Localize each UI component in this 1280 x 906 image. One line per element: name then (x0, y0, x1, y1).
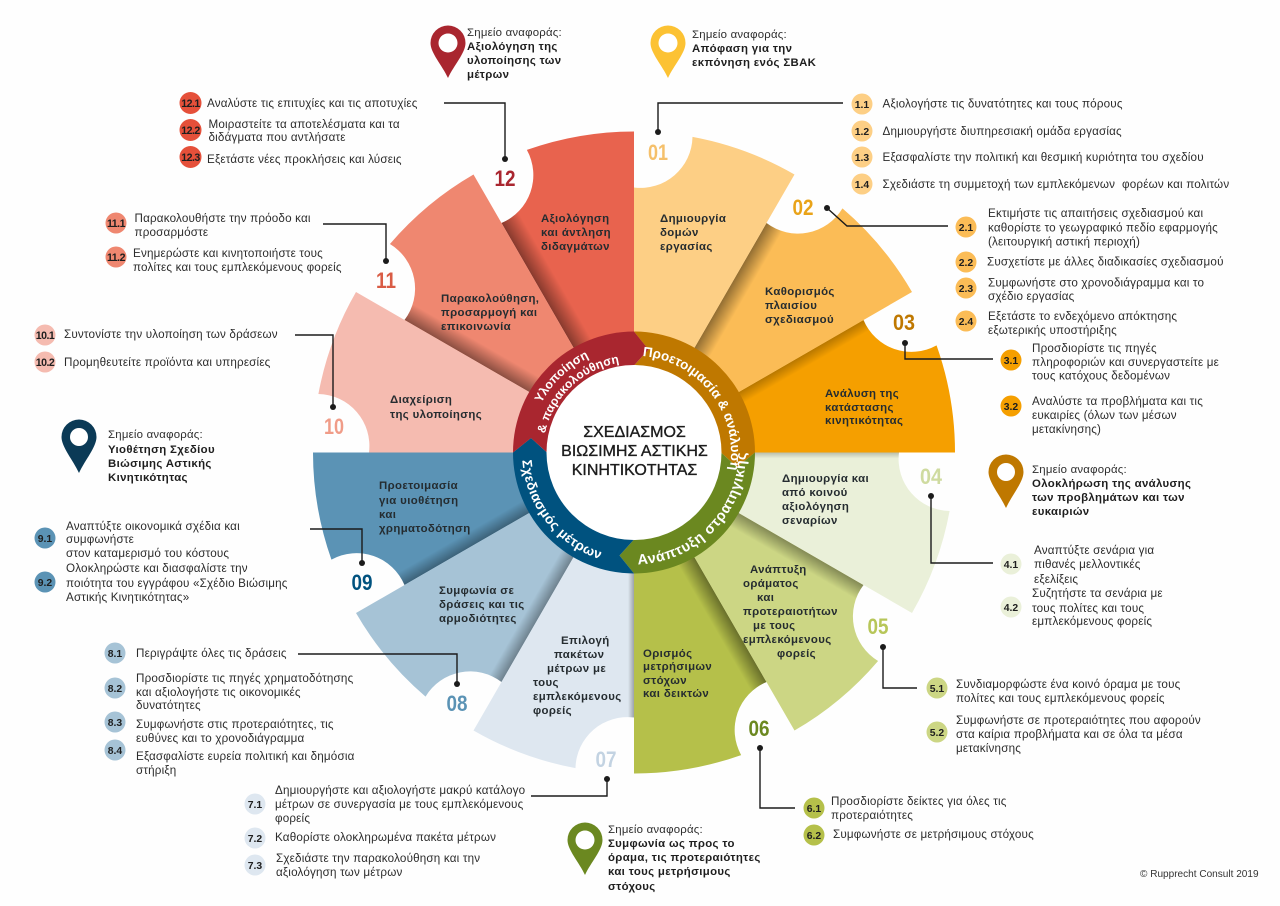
milestone: Απόφαση για την εκπόνηση ενός ΣΒΑΚ (650, 26, 817, 78)
milestone: Συμφωνία ως προς το όραμα: και τους μετρήσιμους (608, 866, 731, 878)
tasks 5: Συμφωνήστε σε προτεραιότητες που αφορούν (956, 714, 1201, 727)
panel: wheel of 12 steps (313, 132, 955, 774)
tasks 11: Ενημερώστε και κινητοποιήστε τους (133, 247, 323, 260)
tasks 2: Συμφωνήστε στο χρονοδιάγραμμα και το (988, 276, 1204, 290)
milestone: Ολοκλήρωση της ανάλυσης (988, 454, 1191, 518)
ring sector: Υλοποίηση & παρακολούθηση (513, 332, 648, 452)
copyright: © Rupprecht Consult 2019 (1140, 869, 1259, 880)
segment labels: Συμφωνία σε (439, 585, 514, 597)
tasks 3 (1000, 342, 1219, 436)
milestone: Συμφωνία ως προς το όραμα: Συμφωνία ως προς το (608, 838, 735, 850)
tasks 6: 6.2 (807, 831, 821, 842)
tasks 8 (104, 642, 355, 777)
segment labels: προσαρμογή και (441, 307, 537, 319)
segment labels: δράσεις και τις (439, 599, 525, 611)
segment labels: Δημιουργία (660, 213, 726, 225)
tasks 3: Προσδιορίστε τις πηγές (1032, 342, 1157, 355)
segment 04: Δημιουργία και από κοινού αξιολόγηση σεναρίων (732, 452, 950, 613)
ring sector: Σχεδιασμός μέτρων (513, 438, 634, 574)
segment 09: Προετοιμασία για υιοθέτηση και χρηματοδότηση (313, 452, 530, 585)
segment labels: τους (533, 677, 559, 689)
tasks 10 (34, 324, 278, 372)
segment labels: στόχων (643, 675, 687, 687)
ring text: orange: Προετοιμασία & ανάλυση (643, 346, 740, 470)
tasks 1: 1.3 (855, 153, 869, 164)
step numbers: 08 (446, 691, 468, 716)
segment labels: Ορισμός (643, 648, 692, 660)
segment labels: Διαχείριση (390, 394, 452, 406)
tasks 3: τους κατόχους δεδομένων (1032, 370, 1170, 382)
step numbers: 02 (792, 195, 814, 220)
ring sector: Προετοιμασία & ανάλυση (634, 332, 755, 467)
tasks 7: 7.1 (248, 800, 262, 811)
tasks 6: 6.1 (807, 804, 821, 815)
tasks 7: Καθορίστε ολοκληρωμένα πακέτα μέτρων (275, 831, 496, 844)
tasks 9: συμφωνήστε (66, 533, 134, 546)
tasks 4: εμπλεκόμενους φορείς (1032, 615, 1152, 628)
tasks 10: 10.2 (36, 357, 55, 369)
tasks 4: 4.2 (1004, 603, 1018, 614)
tasks 5: στα καίρια προβλήματα και σε όλα τα μέσα (956, 728, 1183, 741)
tasks 8: και αξιολογήστε τις οικονομικές (136, 686, 301, 699)
segment labels: μετρήσιμων (643, 661, 712, 673)
milestone: Ολοκλήρωση της ανάλυσης: Ολοκλήρωση της ανάλυσης (1032, 478, 1191, 490)
icon: navy pin (62, 420, 96, 473)
tasks 2: καθορίστε το γεωγραφικό πεδίο εφαρμογής (988, 222, 1218, 234)
segment labels: αρμοδιότητες (439, 613, 517, 625)
tasks 2: εξωτερικής υποστήριξης (988, 324, 1117, 337)
step numbers: 05 (868, 614, 888, 639)
tasks 10: Συντονίστε την υλοποίηση των δράσεων (64, 328, 278, 341)
tasks 6 (804, 795, 1034, 846)
milestone: Ολοκλήρωση της ανάλυσης: ευκαιριών (1032, 506, 1090, 518)
segment labels: και άντληση (541, 227, 611, 239)
segment labels: Παρακολούθηση, (441, 293, 539, 305)
title (561, 424, 708, 479)
tasks 11 (106, 212, 342, 274)
milestone: Συμφωνία ως προς το όραμα: Σημείο αναφοράς: (608, 824, 703, 836)
tasks 12: 12.3 (181, 152, 200, 164)
tasks 2: Συσχετίστε με άλλες διαδικασίες σχεδιασμού (987, 256, 1224, 268)
step numbers: 12 (494, 166, 516, 191)
tasks 3: πληροφοριών και συνεργαστείτε με (1032, 356, 1219, 369)
step numbers: 11 (376, 268, 396, 293)
tasks 4: Αναπτύξτε σενάρια για (1034, 544, 1154, 557)
tasks 11: 11.2 (107, 252, 126, 264)
title: ΣΧΕΔΙΑΣΜΟΣ (583, 424, 686, 441)
tasks 8: στήριξη (136, 764, 176, 777)
icon: green pin (568, 822, 602, 875)
milestone: Αξιολόγηση της υλοποίησης (430, 26, 562, 81)
tasks 4 (1000, 544, 1163, 628)
tasks 1: Εξασφαλίστε την πολιτική και θεσμική κυριότητα του σχεδίου (882, 151, 1204, 164)
milestone: Αξιολόγηση της υλοποίησης: Σημείο αναφοράς: (467, 27, 562, 39)
milestone: Υιοθέτηση Σχεδίου: Κινητικότητας (108, 472, 188, 484)
segment 05: Ανάπτυξη οράματος και προτεραιοτήτων (694, 513, 878, 730)
segment labels: Ανάλυση της (825, 388, 899, 400)
tasks 2 (956, 207, 1224, 337)
icon: orange pin (988, 454, 1024, 508)
tasks 1: Αξιολογήστε τις δυνατότητες και τους πόρους (882, 98, 1123, 110)
tasks 8: 8.3 (108, 718, 122, 729)
tasks 12 (180, 92, 418, 168)
segment 03: Ανάλυση της κατάστασης κινητικότητας (738, 320, 955, 452)
segment labels: οράματος (743, 578, 799, 590)
segment 06: Ορισμός μετρήσιμων στόχων και δεικτών (634, 557, 766, 774)
tasks 7: Σχεδιάστε την παρακολούθηση και την (276, 852, 480, 865)
milestone: Υιοθέτηση Σχεδίου (62, 420, 215, 484)
segment labels (379, 213, 903, 717)
tasks 4: εξελίξεις (1034, 573, 1078, 586)
step numbers: 01 (648, 140, 668, 165)
tasks 11: προσαρμόστε (134, 226, 208, 239)
tasks 7: φορείς (275, 812, 310, 825)
milestone: Απόφαση για την εκπόνηση ενός ΣΒΑΚ: Απόφαση για την (692, 43, 792, 55)
segment labels: Δημιουργία και (782, 473, 869, 485)
milestone: Ολοκλήρωση της ανάλυσης: Σημείο αναφοράς: (1032, 464, 1127, 476)
segment 11: Παρακολούθηση, προσαρμογή και επικοινωνία (390, 174, 574, 392)
tasks 11: Παρακολουθήστε την πρόοδο και (134, 212, 311, 225)
tasks 12: Εξετάστε νέες προκλήσεις και λύσεις (207, 153, 402, 166)
tasks 2: (λειτουργική αστική περιοχή) (988, 236, 1140, 248)
segment labels: χρηματοδότηση (379, 523, 471, 535)
segment labels: Καθορισμός (765, 286, 835, 298)
tasks 7: 7.3 (248, 861, 262, 872)
segment labels: σχεδιασμού (765, 314, 834, 326)
tasks 12: 12.1 (181, 98, 200, 110)
segment labels: επικοινωνία (441, 321, 511, 333)
segment labels: από κοινού (782, 487, 848, 499)
segment labels: πλαισίου (765, 300, 817, 312)
tasks 5: πολίτες και τους εμπλεκόμενους φορείς (956, 692, 1165, 705)
tasks 3: Αναλύστε τα προβλήματα και τις (1032, 395, 1203, 408)
milestone: Συμφωνία ως προς το όραμα: όραμα, τις προτεραιότητες (608, 852, 761, 864)
segment labels: και (379, 509, 396, 521)
central ring (513, 332, 755, 574)
tasks 11: πολίτες και τους εμπλεκόμενους φορείς (133, 261, 342, 274)
tasks 3: μετακίνησης) (1032, 423, 1101, 436)
segment labels: μέτρων με (547, 663, 606, 675)
tasks 6: Συμφωνήστε σε μετρήσιμους στόχους (833, 828, 1034, 841)
segment labels: φορείς (777, 648, 816, 660)
tasks 3: 3.1 (1004, 356, 1018, 367)
tasks 9: 9.1 (38, 534, 52, 545)
tasks 11: 11.1 (107, 218, 126, 230)
tasks 2: 2.4 (959, 317, 973, 328)
tasks 7: μέτρων σε συνεργασία με τους εμπλεκόμενους (275, 798, 524, 811)
ring sector: Ανάπτυξη στρατηγικής (620, 452, 755, 574)
segment labels: Αξιολόγηση (541, 213, 609, 225)
tasks 3: 3.2 (1004, 402, 1018, 413)
tasks 7: 7.2 (248, 834, 262, 845)
tasks 5: 5.1 (930, 684, 944, 695)
step numbers: 03 (893, 310, 915, 335)
title: ΒΙΩΣΙΜΗΣ ΑΣΤΙΚΗΣ (561, 443, 708, 460)
tasks 7 (244, 784, 525, 879)
milestone: Υιοθέτηση Σχεδίου: Βιώσιμης Αστικής (108, 458, 212, 470)
tasks 9: ποιότητα του εγγράφου «Σχέδιο Βιώσιμης (66, 577, 288, 590)
tasks 12: Μοιραστείτε τα αποτελέσματα και τα (208, 118, 400, 131)
tasks 6: Προσδιορίστε δείκτες για όλες τις (831, 795, 1007, 808)
segment labels: φορείς (533, 705, 572, 717)
tasks 2: σχέδιο εργασίας (988, 290, 1075, 303)
tasks 8: 8.2 (108, 684, 122, 695)
tasks 3: ευκαιρίες (όλων των μέσων (1032, 409, 1177, 422)
segment labels: κατάστασης (825, 402, 894, 414)
segment labels: και (757, 592, 774, 604)
tasks 4: τους πολίτες και τους (1032, 602, 1144, 615)
milestone: Αξιολόγηση της υλοποίησης: Αξιολόγηση της (467, 41, 558, 53)
segment labels: εμπλεκόμενους (743, 634, 832, 646)
step numbers: 06 (748, 716, 770, 741)
segment 08: Συμφωνία σε δράσεις και τις αρμοδιότητες (356, 513, 574, 696)
ring text: blue: Σχεδιασμός μέτρων (520, 460, 602, 558)
tasks 9: Αναπτύξτε οικονομικά σχέδια και (66, 520, 240, 533)
tasks 1 (852, 94, 1229, 194)
tasks 1: 1.2 (855, 127, 869, 138)
segment 10: Διαχείριση της υλοποίησης (318, 292, 547, 452)
tasks 2: 2.3 (959, 284, 973, 295)
milestone: Ολοκλήρωση της ανάλυσης: των προβλημάτων και των (1032, 492, 1185, 504)
tasks 5: 5.2 (930, 728, 944, 739)
tasks 4: 4.1 (1004, 560, 1018, 571)
step numbers: 10 (324, 414, 344, 439)
segment labels: εργασίας (660, 241, 713, 253)
segment 02: Καθορισμός πλαισίου σχεδιασμού (694, 208, 912, 392)
tasks 8: ευθύνες και το χρονοδιάγραμμα (136, 732, 305, 745)
milestone: Απόφαση για την εκπόνηση ενός ΣΒΑΚ: Σημείο αναφοράς: (692, 29, 787, 41)
ring text: green: Ανάπτυξη στρατηγικής (638, 453, 749, 564)
tasks 1: 1.4 (855, 180, 869, 191)
milestone: Υιοθέτηση Σχεδίου: Σημείο αναφοράς: (108, 429, 203, 441)
tasks 5 (926, 678, 1201, 755)
icon: yellow pin (650, 26, 686, 78)
tasks 2: Εξετάστε το ενδεχόμενο απόκτησης (988, 310, 1177, 323)
segment labels: και δεικτών (643, 688, 709, 700)
segment labels: εμπλεκόμενους (533, 691, 622, 703)
ring text: red line 2: & παρακολούθηση (538, 356, 620, 433)
tasks 8: δυνατότητες (136, 699, 201, 712)
tasks 1: 1.1 (855, 100, 869, 111)
segment labels: πακέτων (554, 649, 604, 661)
ring text: red line 1: Υλοποίηση (534, 352, 590, 400)
title: ΚΙΝΗΤΙΚΟΤΗΤΑΣ (572, 462, 697, 479)
segment labels: Ανάπτυξη (750, 564, 807, 576)
milestone: Συμφωνία ως προς το όραμα: στόχους (608, 881, 656, 893)
tasks 12: διδάγματα που αντλήσατε (208, 131, 346, 144)
tasks 5: μετακίνησης (956, 742, 1021, 755)
tasks 2: 2.2 (959, 258, 973, 269)
tasks 4: Συζητήστε τα σενάρια με (1032, 587, 1163, 600)
tasks 8: Περιγράψτε όλες τις δράσεις (136, 647, 287, 660)
segment 07: Επιλογή πακέτων μέτρων (474, 558, 634, 768)
tasks 10: 10.1 (36, 330, 55, 342)
tasks 2: Εκτιμήστε τις απαιτήσεις σχεδιασμού και (988, 207, 1203, 220)
center circle (546, 365, 722, 540)
tasks 5: Συνδιαμορφώστε ένα κοινό όραμα με τους (956, 678, 1181, 691)
milestone: Συμφωνία ως προς το όραμα (568, 822, 761, 893)
tasks 8: 8.1 (108, 649, 122, 660)
icon: red pin (430, 26, 466, 78)
step numbers: 04 (920, 464, 943, 489)
milestone: Αξιολόγηση της υλοποίησης: μέτρων (467, 69, 509, 81)
segment labels: προτεραιοτήτων (743, 606, 838, 618)
tasks 12: 12.2 (181, 125, 200, 137)
tasks 9 (34, 520, 288, 604)
segment labels: διδαγμάτων (541, 241, 610, 253)
tasks 4: πιθανές μελλοντικές (1034, 558, 1141, 571)
segment labels: Επιλογή (561, 635, 610, 647)
segment labels: αξιολόγηση (782, 501, 849, 513)
segment labels: κινητικότητας (825, 415, 903, 427)
segment labels: Προετοιμασία (379, 480, 458, 492)
tasks 8: Συμφωνήστε στις προτεραιότητες, τις (136, 718, 334, 731)
step numbers: 09 (352, 570, 372, 595)
segment 01: Δημιουργία δομών εργασίας (634, 137, 794, 366)
segment labels: με τους (753, 620, 795, 632)
tasks 6: προτεραιότητες (831, 809, 913, 822)
step numbers (324, 140, 943, 772)
milestone: Υιοθέτηση Σχεδίου: Υιοθέτηση Σχεδίου (108, 444, 215, 456)
segment labels: σεναρίων (782, 515, 838, 527)
tasks 10: Προμηθευτείτε προϊόντα και υπηρεσίες (64, 356, 271, 369)
segment labels: για υιοθέτηση (379, 495, 458, 507)
tasks 12: Αναλύστε τις επιτυχίες και τις αποτυχίες (207, 97, 418, 110)
step numbers: 07 (596, 747, 616, 772)
segment labels: δομών (660, 227, 699, 239)
tasks 1: Σχεδιάστε τη συμμετοχή των εμπλεκόμενων φορέων και πολιτών (882, 178, 1229, 191)
milestone: Αξιολόγηση της υλοποίησης: υλοποίησης των (467, 55, 561, 67)
tasks 1: Δημιουργήστε διυπηρεσιακή ομάδα εργασίας (882, 125, 1122, 138)
tasks 9: Ολοκληρώστε και διασφαλίστε την (66, 562, 248, 575)
tasks 8: 8.4 (108, 746, 122, 757)
tasks 2: 2.1 (959, 223, 973, 234)
tasks 9: στον καταμερισμό του κόστους (66, 547, 229, 560)
segment 12: Αξιολόγηση και άντληση διδαγμάτων (502, 132, 634, 348)
tasks 7: αξιολόγηση των μέτρων (276, 866, 402, 879)
connector lines (295, 103, 993, 808)
segment labels: της υλοποίησης (390, 409, 482, 421)
tasks 7: Δημιουργήστε και αξιολογήστε μακρύ κατάλογο (275, 784, 525, 797)
milestone: Απόφαση για την εκπόνηση ενός ΣΒΑΚ: εκπόνηση ενός ΣΒΑΚ (692, 57, 817, 69)
tasks 8: Προσδιορίστε τις πηγές χρηματοδότησης (136, 672, 354, 685)
tasks 9: Αστικής Κινητικότητας» (66, 591, 189, 604)
tasks 9: 9.2 (38, 578, 52, 589)
tasks 8: Εξασφαλίστε ευρεία πολιτική και δημόσια (136, 750, 355, 763)
